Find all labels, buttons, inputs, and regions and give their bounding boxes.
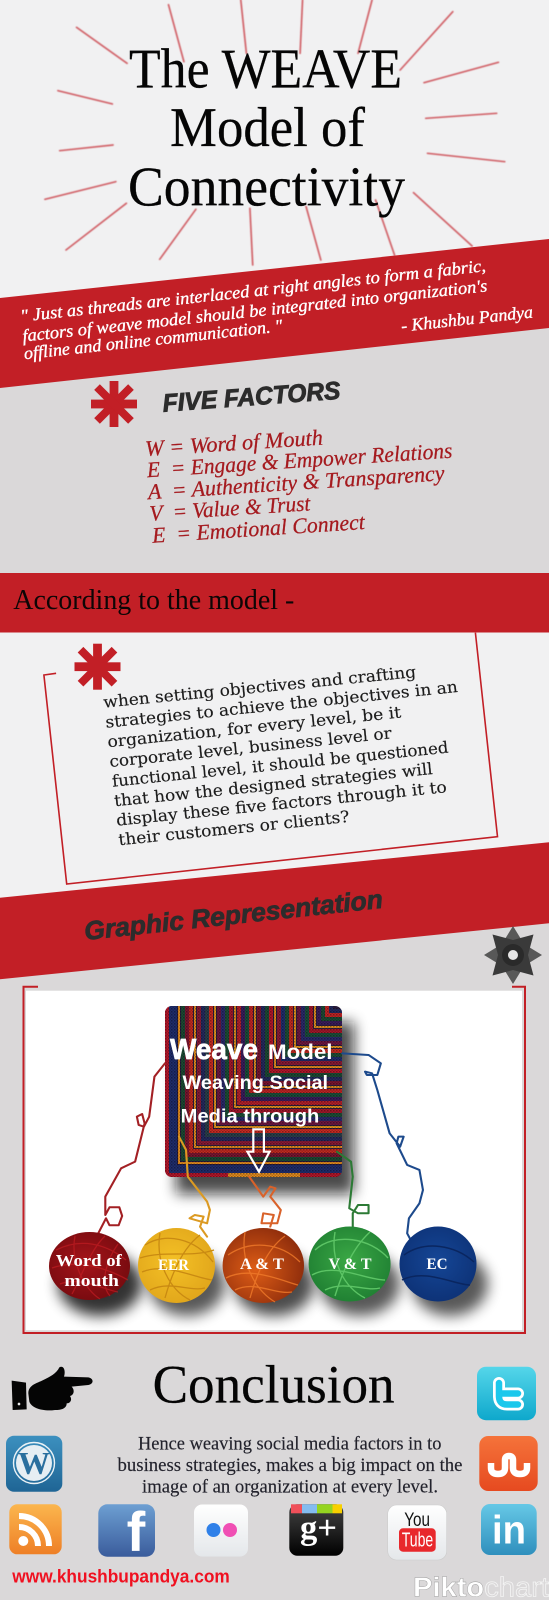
- icon: stumbleupon: [479, 1436, 538, 1491]
- yarn ball: word of mouth: [49, 1232, 142, 1316]
- conclusion text: [118, 1433, 462, 1498]
- factor list: [144, 425, 453, 548]
- icon: google plus: g+: [300, 1510, 337, 1547]
- knit square caption: [170, 1034, 332, 1128]
- band heading: According to the model -: [13, 585, 294, 616]
- icon: facebook: f: [127, 1500, 146, 1563]
- statement text: their customers or clients?: [117, 807, 350, 849]
- arrow: down: [247, 1129, 270, 1172]
- statement text: display these five factors through it to: [115, 777, 448, 830]
- yarn ball: V and T: V & T: [328, 1256, 372, 1273]
- statement text: [102, 662, 459, 849]
- knit square: [165, 1006, 342, 1177]
- band: according to the model: [0, 573, 549, 632]
- statement text: strategies to achieve the objectives in an: [104, 677, 459, 732]
- quote text: offline and online communication. ": [23, 315, 284, 363]
- heading: conclusion: Conclusion: [153, 1355, 395, 1415]
- icon: youtube: [388, 1505, 447, 1560]
- factor list: V = Value & Trust: [149, 490, 312, 526]
- icon: youtube: You: [404, 1510, 430, 1531]
- title: The WEAVE: [129, 38, 402, 100]
- factor list: W = Word of Mouth: [144, 425, 324, 461]
- yarn ball: EC: EC: [426, 1256, 448, 1273]
- conclusion text: business strategies, makes a big impact on the: [118, 1455, 462, 1476]
- icon: youtube: Tube: [402, 1530, 433, 1552]
- knit square caption: Model: [268, 1041, 332, 1064]
- knit square caption: Weave: [170, 1034, 258, 1066]
- diagram frame: [24, 987, 525, 1333]
- band: graphic representation: [0, 842, 549, 979]
- icon: twitter: [477, 1367, 536, 1420]
- yarn ball: word of mouth: Word of: [56, 1251, 122, 1270]
- factor list: E = Emotional Connect: [150, 509, 366, 548]
- quote text: [19, 255, 534, 363]
- icon: flickr: [194, 1504, 248, 1556]
- icon: linkedin: in: [492, 1508, 526, 1552]
- quote band: [0, 239, 549, 388]
- quote text: - Khushbu Pandya: [400, 301, 534, 336]
- conclusion text: Hence weaving social media factors in to: [138, 1433, 441, 1454]
- icon: pointing hand: [12, 1367, 93, 1410]
- yarn threads: [98, 1053, 423, 1240]
- title: Model of: [170, 97, 365, 159]
- knit square caption: Media through: [181, 1107, 319, 1128]
- icon: rss: [9, 1504, 62, 1554]
- title: [128, 38, 405, 218]
- yarn ball: A and T: A & T: [240, 1256, 284, 1273]
- factor list: A = Authenticity & Transparency: [145, 460, 445, 504]
- yarn ball: word of mouth: mouth: [64, 1271, 120, 1290]
- icon: wordpress: W: [18, 1445, 50, 1481]
- title: Connectivity: [128, 156, 405, 218]
- heading: five factors: FIVE FACTORS: [162, 377, 342, 418]
- decorative burst rays around the title: [45, 0, 505, 265]
- icon: google plus: [289, 1504, 343, 1556]
- icon: linkedin: [481, 1504, 537, 1555]
- website link: www.khushbupandya.com: [11, 1567, 230, 1587]
- yarn ball: V and T: [309, 1226, 400, 1316]
- shadow of knit square: [176, 1022, 354, 1194]
- icon: wordpress: [6, 1436, 62, 1492]
- yarn ball: A and T: [223, 1228, 314, 1316]
- conclusion text: image of an organization at every level.: [142, 1477, 438, 1498]
- band heading: Graphic Representation: [83, 884, 384, 946]
- statement text: organization, for every level, be it: [106, 703, 403, 751]
- statement text: corporate level, business level or: [108, 723, 393, 771]
- panel: weave diagram: [24, 987, 525, 1333]
- icon: facebook: [98, 1500, 155, 1563]
- quote text: factors of weave model should be integrated into organization's: [21, 275, 488, 346]
- yarn ball: EER: EER: [158, 1257, 189, 1274]
- quote text: " Just as threads are interlaced at right angles to form a fabric,: [19, 255, 487, 326]
- knit square caption: Weaving Social: [182, 1072, 328, 1094]
- factor list: E = Engage & Empower Relations: [145, 438, 453, 482]
- panel: statement frame: [44, 633, 498, 884]
- yarn ball: EER: [138, 1228, 225, 1316]
- statement text: functional level, it should be questioned: [111, 738, 449, 791]
- icon: red asterisk, statement: [74, 644, 120, 690]
- yarn ball: EC: [400, 1226, 488, 1316]
- statement text: that how the designed strategies will: [113, 759, 433, 810]
- statement text: when setting objectives and crafting: [102, 662, 417, 712]
- icon: dark star: [484, 926, 542, 984]
- icon: red asterisk, five factors: [91, 381, 137, 427]
